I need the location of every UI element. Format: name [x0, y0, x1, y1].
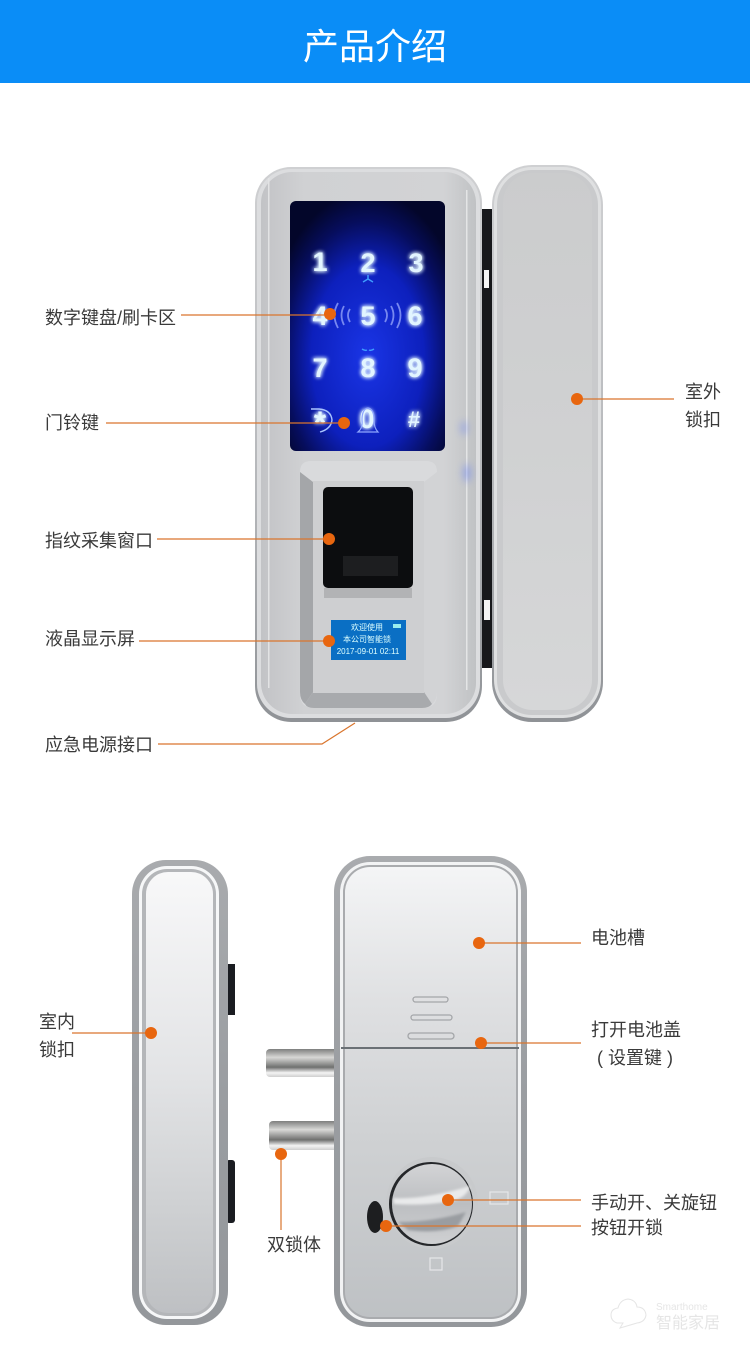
watermark — [611, 1299, 720, 1332]
cover grip slots — [408, 997, 454, 1039]
window sill — [324, 588, 412, 598]
keypad panel: 6 — [407, 301, 423, 331]
black backing plate — [480, 209, 496, 668]
callout: LCD — [45, 629, 335, 649]
callout: emergency power — [45, 723, 355, 755]
watermark: Smarthome — [656, 1302, 708, 1313]
callout: emergency power: 应急电源接口 — [45, 735, 153, 755]
callout: open battery cover: 打开电池盖 — [591, 1020, 681, 1040]
callout: outdoor catch — [571, 382, 721, 430]
callout: button unlock: 按钮开锁 — [591, 1218, 663, 1238]
back view: indoor side lock — [132, 860, 235, 1325]
lock body — [255, 167, 482, 722]
callout: manual knob — [442, 1193, 717, 1213]
rotary knob — [386, 1157, 478, 1249]
front lock product — [255, 165, 603, 722]
header banner — [0, 0, 750, 83]
callout: outdoor catch: 锁扣 — [685, 410, 721, 430]
keypad panel: 1 — [312, 247, 328, 277]
icon: function marks — [362, 275, 374, 350]
battery cover seam — [341, 1047, 519, 1049]
keypad panel: 9 — [407, 353, 423, 383]
fingerprint module — [300, 461, 437, 708]
callout: doorbell key: 门铃键 — [45, 413, 99, 433]
callout: battery compartment: 电池槽 — [591, 928, 645, 948]
keypad panel — [290, 201, 445, 451]
icon: back arrow — [311, 409, 332, 432]
engraved lock marks — [430, 1192, 508, 1270]
callout: fingerprint window — [45, 531, 335, 551]
icon: bell — [358, 408, 378, 432]
keypad panel: 3 — [408, 248, 424, 278]
callout: manual knob: 手动开、关旋钮 — [591, 1193, 717, 1213]
status light glow — [461, 421, 507, 482]
LCD screen: 欢迎使用 — [351, 622, 383, 632]
callout: double bolt: 双锁体 — [267, 1235, 321, 1255]
callout: keypad — [45, 308, 336, 328]
keypad panel: * — [314, 405, 327, 441]
double bolts — [266, 1049, 341, 1150]
callout: battery compartment — [473, 928, 645, 949]
callout: fingerprint window: 指纹采集窗口 — [45, 531, 153, 551]
keypad panel: 8 — [360, 353, 376, 383]
callout: double bolt — [267, 1148, 321, 1255]
side tabs — [226, 964, 235, 1015]
keypad panel: 5 — [360, 301, 376, 331]
keypad panel: 4 — [312, 301, 328, 331]
callout: button unlock — [380, 1218, 663, 1238]
back view: battery lock body — [334, 856, 527, 1327]
callout: indoor catch — [39, 1012, 157, 1060]
callout: doorbell key — [45, 413, 350, 433]
LCD screen: 2017-09-01 02:11 — [337, 647, 400, 656]
watermark: 智能家居 — [656, 1314, 720, 1332]
icon: card waves — [334, 303, 400, 328]
fingerprint window — [323, 487, 413, 588]
keypad panel: 7 — [312, 353, 328, 383]
callout: indoor catch: 室内 — [39, 1012, 75, 1032]
callout: outdoor catch: 室外 — [685, 382, 721, 402]
callout: open battery cover — [475, 1020, 681, 1068]
LCD screen: 本公司智能锁 — [343, 634, 391, 644]
keypad panel: # — [408, 407, 420, 432]
callout: indoor catch: 锁扣 — [39, 1040, 75, 1060]
callout: LCD: 液晶显示屏 — [45, 629, 135, 649]
unlock button — [367, 1201, 383, 1233]
keypad panel: 2 — [360, 248, 376, 278]
outer handle — [492, 165, 603, 722]
callout: open battery cover: ( 设置键 ) — [597, 1048, 673, 1068]
title: 产品介绍 — [303, 26, 447, 67]
keypad panel: 0 — [359, 404, 375, 434]
callout: keypad: 数字键盘/刷卡区 — [45, 308, 176, 328]
LCD screen — [331, 620, 406, 660]
